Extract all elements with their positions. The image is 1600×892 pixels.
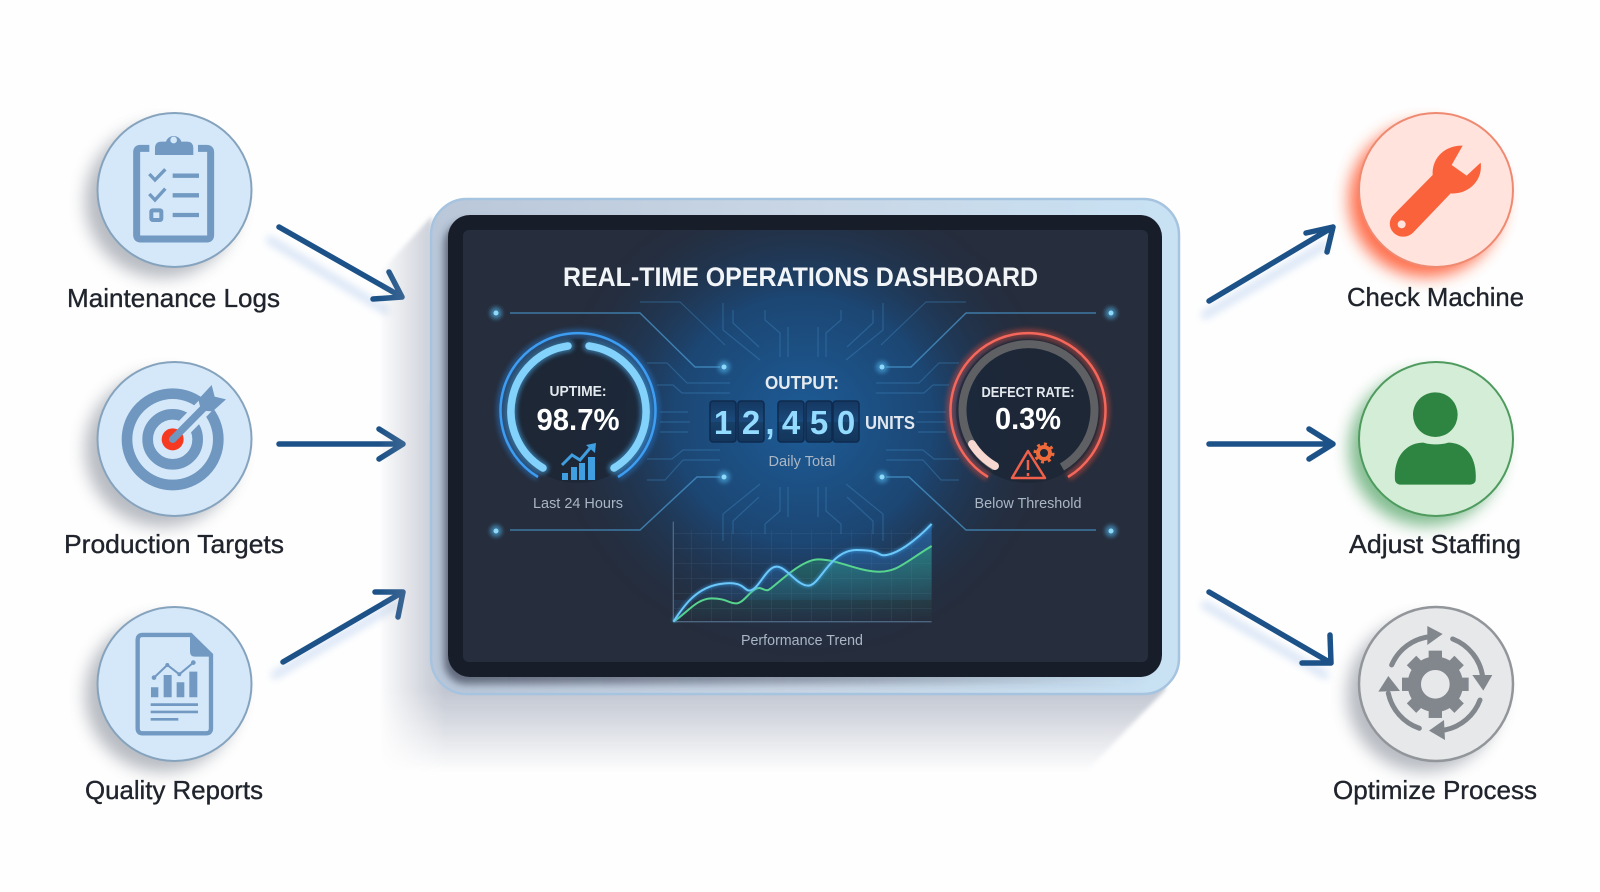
defect label: DEFECT RATE: xyxy=(982,384,1074,401)
digit boxes: 5 xyxy=(810,404,828,441)
arrow: dashboard to check machine xyxy=(1205,227,1333,315)
label: Production Targets xyxy=(64,529,284,559)
input arrows xyxy=(270,227,403,675)
input: Maintenance Logs xyxy=(67,113,280,313)
output caption: Daily Total xyxy=(768,453,836,470)
icon: person xyxy=(1395,392,1476,485)
dashboard title: REAL-TIME OPERATIONS DASHBOARD xyxy=(563,262,1038,292)
icon: wrench xyxy=(1390,146,1481,237)
arrow: reports to dashboard xyxy=(275,592,403,675)
dashboard tablet xyxy=(380,199,1179,775)
digit boxes: 4 xyxy=(782,404,801,441)
units label: UNITS xyxy=(865,413,915,433)
input: Quality Reports xyxy=(85,607,263,805)
digit boxes: 0 xyxy=(837,404,855,441)
uptime caption: Last 24 Hours xyxy=(533,495,623,512)
digit boxes xyxy=(710,401,859,442)
bezel xyxy=(448,215,1162,677)
label: Check Machine xyxy=(1347,282,1524,312)
node dots xyxy=(490,307,1117,537)
output: Adjust Staffing xyxy=(1349,362,1521,559)
icon: target xyxy=(127,385,226,485)
digit boxes: , xyxy=(765,404,775,441)
screen xyxy=(463,230,1148,662)
icon: clipboard xyxy=(137,136,211,239)
uptime label: UPTIME: xyxy=(550,383,606,400)
output arrows xyxy=(1205,227,1333,675)
circuit traces xyxy=(490,302,1117,541)
label: Adjust Staffing xyxy=(1349,529,1521,559)
icon: rising bars xyxy=(562,443,596,480)
input: Production Targets xyxy=(64,362,284,559)
label: Optimize Process xyxy=(1333,775,1537,805)
tablet frame xyxy=(431,199,1179,694)
icon: report document xyxy=(138,635,213,733)
arrow: logs to dashboard xyxy=(270,227,402,310)
icon: warning and gear xyxy=(1012,444,1053,478)
arrow: dashboard to optimize process xyxy=(1205,592,1331,675)
digit boxes: 2 xyxy=(742,404,760,441)
defect value: 0.3% xyxy=(995,401,1061,436)
gauge: uptime xyxy=(500,333,656,512)
line chart: performance trend xyxy=(673,522,932,649)
chart caption: Performance Trend xyxy=(741,632,863,649)
output: Optimize Process xyxy=(1333,607,1537,805)
gauge: defect rate xyxy=(951,333,1106,512)
arrow: targets to dashboard xyxy=(270,429,403,459)
output label: OUTPUT: xyxy=(765,373,839,393)
output counter xyxy=(710,373,915,470)
output: Check Machine xyxy=(1347,113,1524,312)
bezel shadow xyxy=(444,222,1156,684)
digit boxes: 1 xyxy=(714,404,732,441)
defect caption: Below Threshold xyxy=(974,495,1082,512)
label: Quality Reports xyxy=(85,775,263,805)
arrow: dashboard to adjust staffing xyxy=(1205,429,1333,459)
label: Maintenance Logs xyxy=(67,283,280,313)
uptime value: 98.7% xyxy=(536,402,620,437)
tablet shadow xyxy=(380,216,1165,775)
icon: gear with cycle arrows xyxy=(1378,626,1492,740)
